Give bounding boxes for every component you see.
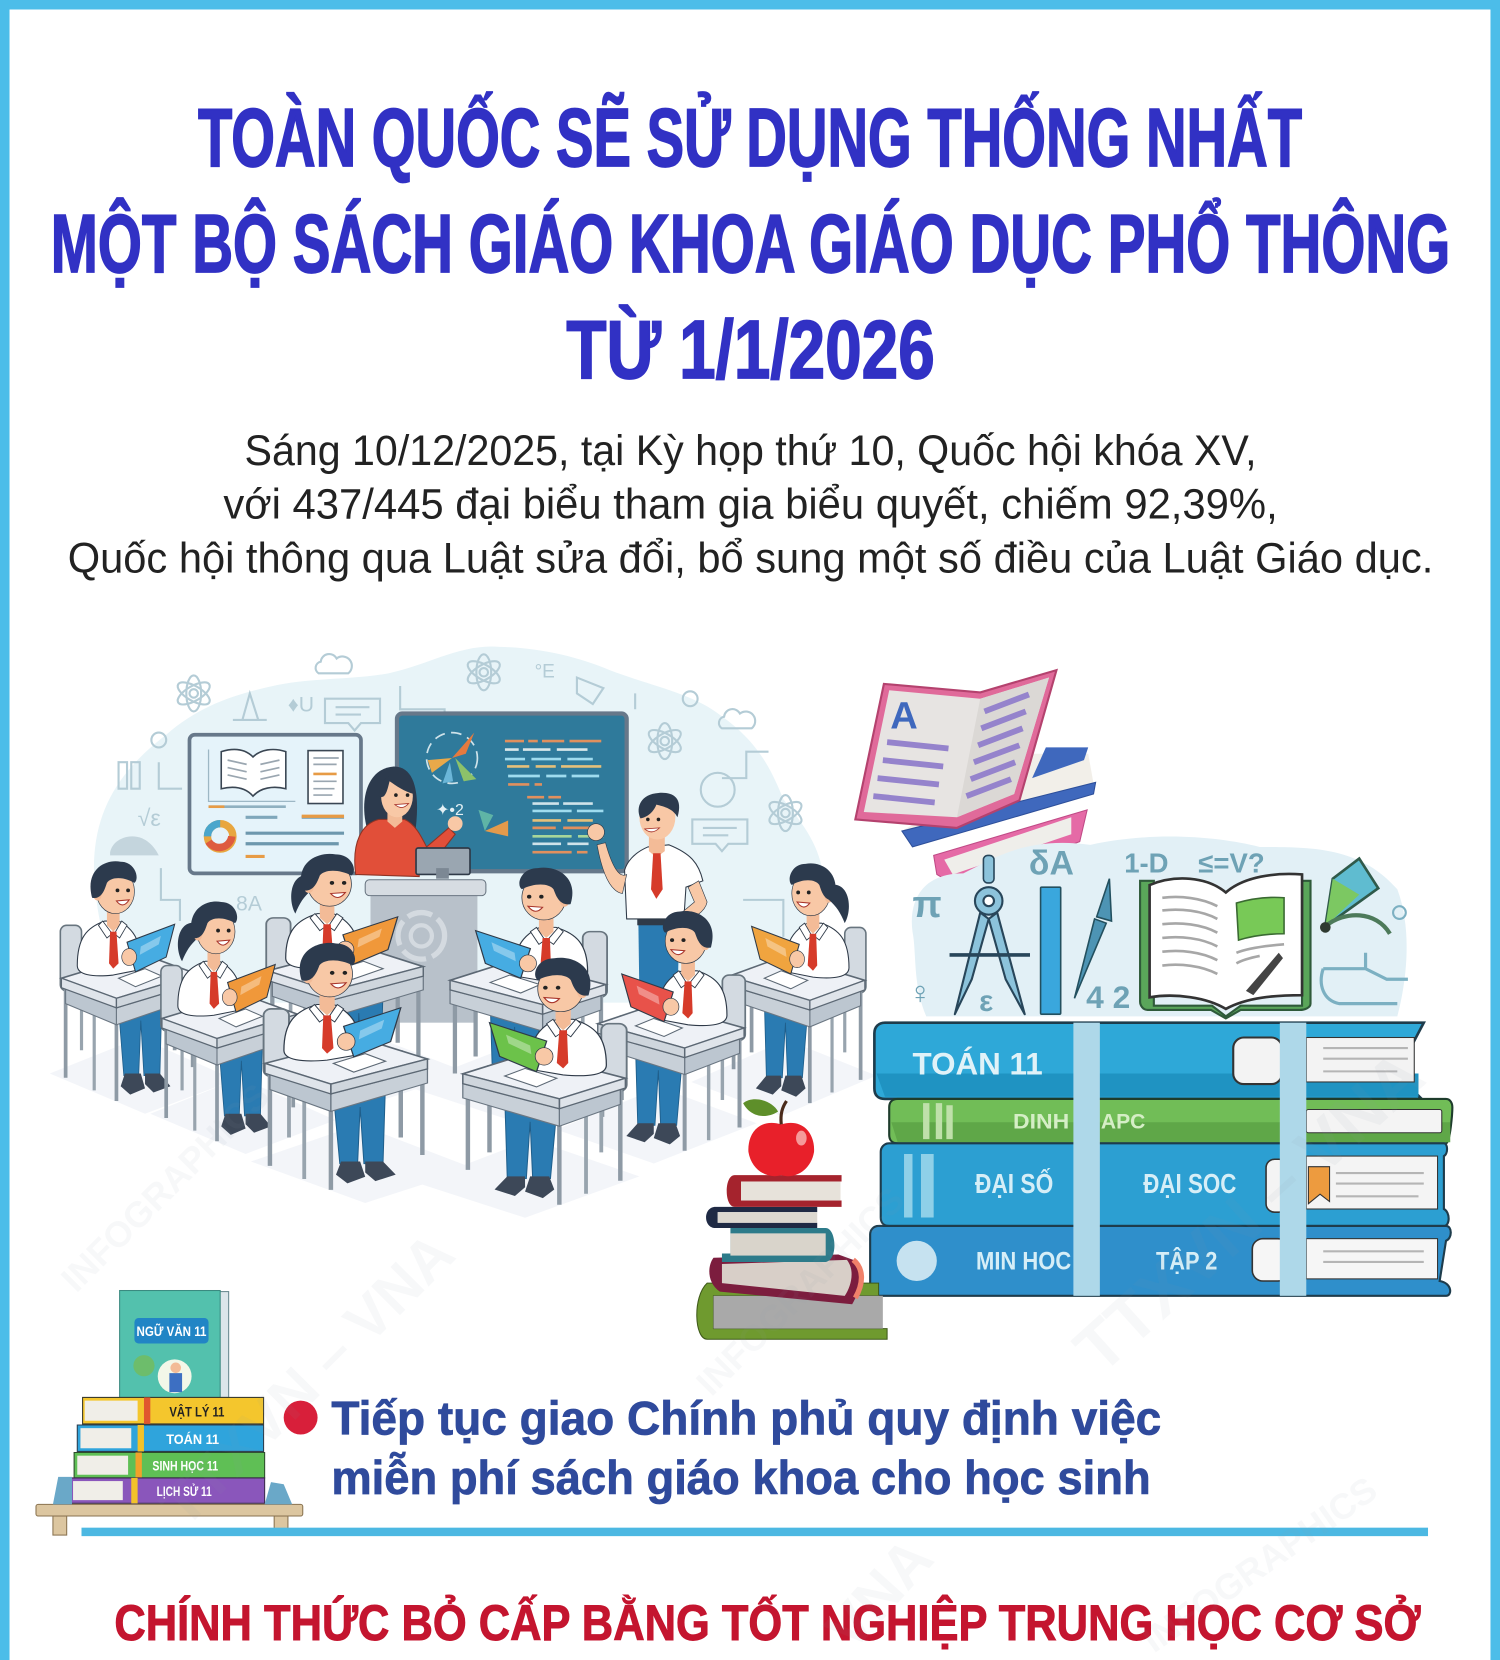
watermark: INFOGRAPHICS (688, 1179, 912, 1403)
book: Tin học tập 2: TẬP 2 (1156, 1245, 1217, 1275)
stacked textbooks: VẬT LÝ 11 (169, 1403, 225, 1420)
book: green (889, 1099, 1452, 1143)
book: Toán 11 (874, 1023, 1424, 1099)
book: green: APC (1101, 1111, 1145, 1134)
paintbrush (1074, 879, 1112, 998)
illustration: math and drawing tools: 1-D (1124, 847, 1169, 878)
student far right (691, 863, 876, 1116)
intro text: Quốc hội thông qua Luật sửa đổi, bổ sung một số điều của Luật Giáo dục. (68, 535, 1433, 582)
illustration: textbooks on small table (36, 1291, 303, 1535)
intro text: với 437/445 đại biểu tham gia biểu quyết, chiếm 92,39%, (223, 481, 1278, 528)
watermark: TTXVN – VNA (1061, 1037, 1438, 1387)
title (51, 90, 1450, 396)
book: green: DINH (1013, 1111, 1069, 1134)
illustration: math and drawing tools: 4 2 (1086, 979, 1130, 1015)
watermark: TTXVN – VNA (147, 1219, 467, 1539)
book: Ngữ văn 11 (120, 1291, 229, 1397)
stacked textbooks (70, 1397, 265, 1503)
blackboard with charts and code (397, 714, 627, 871)
background blob with science doodles: °E (535, 662, 555, 683)
background blob with science doodles: 8A (236, 892, 263, 915)
policy text: miễn phí sách giáo khoa cho học sinh (331, 1451, 1151, 1505)
open notebook (1140, 874, 1311, 1018)
background blob with science doodles: ♦U (288, 693, 314, 716)
blackboard with charts and code: ✦•2 (436, 802, 464, 819)
stacked textbooks: TOÁN 11 (166, 1431, 219, 1447)
policy text: Tiếp tục giao Chính phủ quy định việc (331, 1393, 1161, 1446)
background blob with science doodles: √ε (138, 805, 161, 831)
title: TỪ 1/1/2026 (566, 304, 935, 396)
book: Toán 11: TOÁN 11 (912, 1046, 1043, 1082)
intro text (68, 427, 1433, 582)
illustration: math and drawing tools: ε (979, 985, 993, 1018)
apple (743, 1099, 814, 1176)
illustration: big book stack (870, 1023, 1452, 1296)
red bullet (284, 1401, 318, 1435)
stacked textbooks: SINH HỌC 11 (152, 1458, 218, 1473)
background blob with science doodles (94, 647, 824, 1003)
illustration: math and drawing tools: ♀ (908, 975, 932, 1011)
book: Đại số: ĐẠI SỐ (975, 1167, 1053, 1199)
student front right (417, 958, 639, 1218)
illustration: small book pile with apple (697, 1099, 887, 1339)
watermark: INFOGRAPHICS (1135, 1468, 1384, 1660)
illustration: classroom (50, 647, 876, 1218)
book: Tin học tập 2: MIN HOC (976, 1247, 1071, 1275)
teacher at podium (355, 766, 486, 1023)
book: Đại số: ĐẠI SOC (1143, 1168, 1237, 1199)
book: Đại số (881, 1143, 1449, 1226)
left screen: open book and chart (189, 735, 361, 873)
watermark: INFOGRAPHICS (53, 1075, 277, 1299)
student second from left (150, 901, 336, 1154)
table (36, 1504, 303, 1535)
intro text: Sáng 10/12/2025, tại Kỳ họp thứ 10, Quốc hội khóa XV, (245, 427, 1257, 474)
kite (1320, 859, 1390, 934)
policy text (331, 1393, 1161, 1505)
ruler (1041, 887, 1061, 1014)
illustration: math and drawing tools: ≤=V? (1198, 847, 1265, 878)
illustration: floating open book on book pile: A (890, 695, 918, 737)
illustration: math and drawing tools (908, 837, 1408, 1018)
book: Ngữ văn 11: NGỮ VĂN 11 (137, 1322, 207, 1339)
watermark (53, 1037, 1438, 1660)
stacked textbooks: LỊCH SỬ 11 (157, 1482, 212, 1499)
book: Tin học tập 2 (870, 1226, 1451, 1296)
watermark: VNA (812, 1525, 946, 1660)
compass (950, 855, 1030, 1014)
student back row right (406, 868, 619, 1120)
illustration: math and drawing tools: δA (1029, 844, 1074, 882)
illustration: floating open book on book pile (855, 670, 1096, 887)
student far left (50, 861, 235, 1114)
divider line (82, 1528, 1428, 1536)
student front left (251, 943, 473, 1203)
student second from right (557, 911, 757, 1163)
illustration: math and drawing tools: π (912, 884, 942, 926)
student back row left (254, 854, 467, 1106)
straps (1073, 1023, 1306, 1296)
standing student (588, 793, 707, 995)
